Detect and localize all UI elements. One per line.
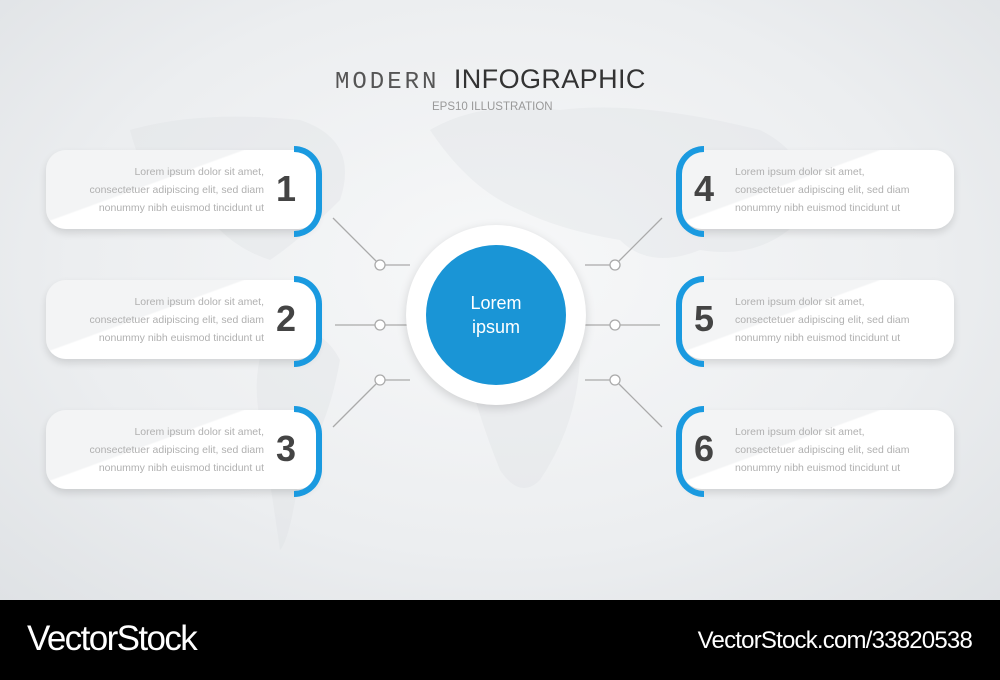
card 1: Lorem ipsum dolor sit amet, [134,166,264,178]
card 3: consectetuer adipiscing elit, sed diam [89,444,264,456]
center circle [406,225,586,405]
card 5: 5 [694,298,714,339]
card 3: Lorem ipsum dolor sit amet, [134,426,264,438]
card 2: nonummy nibh euismod tincidunt ut [99,332,264,344]
center circle: Lorem [470,293,522,313]
card 2: Lorem ipsum dolor sit amet, [134,296,264,308]
card 5: Lorem ipsum dolor sit amet, [735,296,865,308]
card 5: nonummy nibh euismod tincidunt ut [735,332,900,344]
center circle: ipsum [472,317,520,337]
footer: VectorStock.com/33820538 [698,627,972,654]
card 4: 4 [694,168,714,209]
card 2: 2 [276,298,296,339]
card 6 [682,410,954,489]
card 5: consectetuer adipiscing elit, sed diam [735,314,910,326]
footer: VectorStock [27,619,196,658]
subtitle: EPS10 ILLUSTRATION [432,101,553,113]
card 2: consectetuer adipiscing elit, sed diam [89,314,264,326]
card 6: Lorem ipsum dolor sit amet, [735,426,865,438]
card 4: consectetuer adipiscing elit, sed diam [735,184,910,196]
card 4: Lorem ipsum dolor sit amet, [735,166,865,178]
card 6: nonummy nibh euismod tincidunt ut [735,462,900,474]
footer [0,600,1000,680]
card 4: nonummy nibh euismod tincidunt ut [735,202,900,214]
card 3: 3 [276,428,296,469]
title: MODERN INFOGRAPHIC [335,64,646,96]
card 3: nonummy nibh euismod tincidunt ut [99,462,264,474]
card 5 [682,280,954,359]
card 1: 1 [276,168,296,209]
card 4 [682,150,954,229]
card 2 [46,280,318,359]
card 1 [46,150,318,229]
card 1: nonummy nibh euismod tincidunt ut [99,202,264,214]
card 1: consectetuer adipiscing elit, sed diam [89,184,264,196]
card 6: 6 [694,428,714,469]
card 6: consectetuer adipiscing elit, sed diam [735,444,910,456]
card 3 [46,410,318,489]
